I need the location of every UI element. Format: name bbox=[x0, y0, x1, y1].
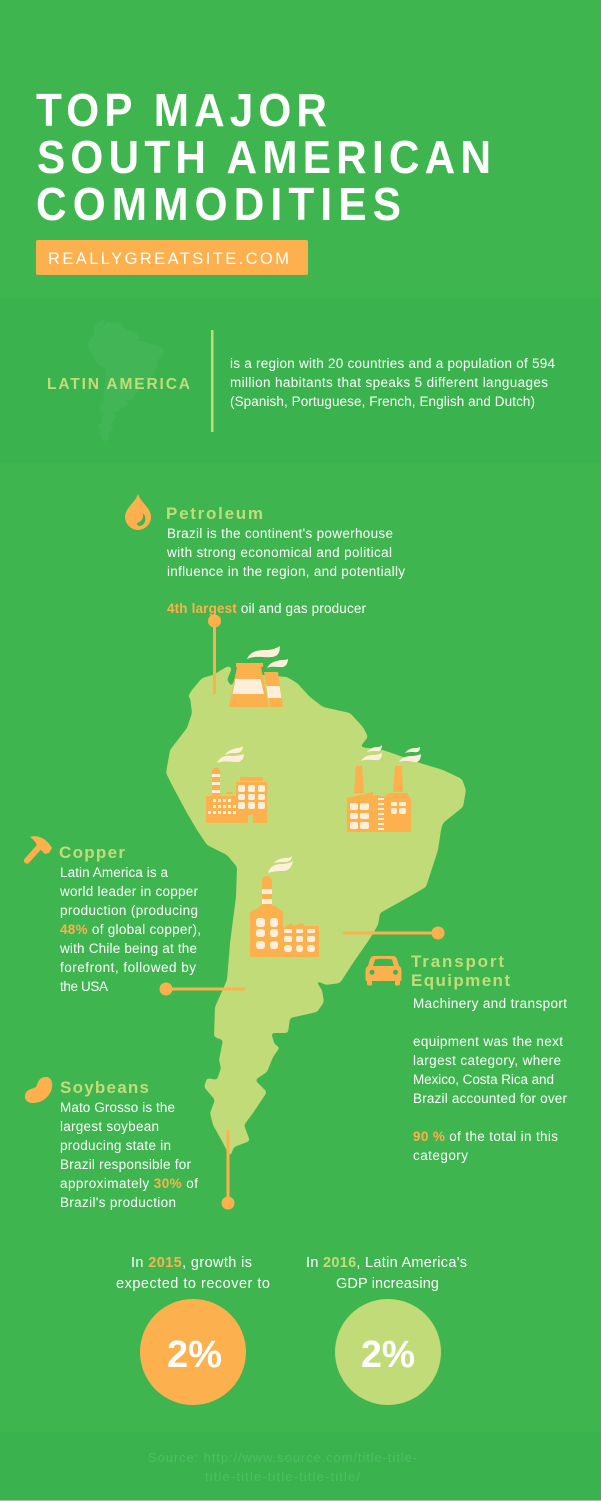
icon: factory centre bbox=[250, 856, 319, 957]
text: 2015 growth: In 2015, growth is bbox=[131, 1255, 252, 1271]
text: 2016 gdp bbox=[306, 1255, 467, 1292]
website badge: REALLYGREATSITE.COM bbox=[48, 250, 289, 268]
soybeans text: Brazil responsible for bbox=[60, 1157, 192, 1172]
petroleum text bbox=[166, 526, 405, 616]
heading: transport equipment: Equipment bbox=[411, 971, 510, 990]
pin: soybeans connector bbox=[222, 1130, 234, 1210]
panel: growth 2015 bbox=[116, 1255, 270, 1405]
icon: faded map silhouette bbox=[88, 320, 164, 443]
copper text: forefront, followed by bbox=[60, 960, 196, 975]
text: 2016 gdp: In 2016, Latin America's bbox=[306, 1255, 467, 1271]
soybeans text: Brazil's production bbox=[60, 1195, 176, 1210]
petroleum text: Brazil is the continent's powerhouse bbox=[167, 526, 393, 541]
map shape bbox=[166, 666, 466, 1157]
stat circle: 2% orange bbox=[140, 1299, 246, 1405]
icon: oil drop bbox=[125, 494, 151, 530]
heading: transport equipment: Transport bbox=[411, 952, 504, 971]
transport text bbox=[413, 996, 568, 1163]
copper text: the USA bbox=[60, 979, 108, 994]
pin: transport connector bbox=[343, 926, 444, 940]
text: 2016 gdp: GDP increasing bbox=[336, 1276, 439, 1292]
stat circle: 2% orange: 2% bbox=[167, 1334, 222, 1376]
panel: latin america intro bbox=[47, 320, 555, 443]
stat circle: 2% green bbox=[335, 1299, 441, 1405]
heading: petroleum: Petroleum bbox=[166, 504, 263, 523]
icon: factory left bbox=[206, 746, 267, 823]
copper text: 48% of global copper), bbox=[60, 922, 201, 937]
copper text bbox=[59, 865, 201, 994]
copper text: production (producing bbox=[60, 903, 198, 918]
website badge bbox=[36, 240, 308, 275]
stat circle: 2% green: 2% bbox=[361, 1334, 415, 1376]
divider bar bbox=[211, 330, 214, 432]
petroleum text: influence in the region, and potentially bbox=[167, 564, 405, 579]
text: 2015 growth bbox=[116, 1255, 270, 1292]
panel: transport equipment bbox=[343, 926, 568, 1163]
intro text: (Spanish, Portuguese, French, English and Dutch) bbox=[230, 394, 535, 409]
intro text bbox=[230, 356, 555, 409]
title: TOP MAJOR bbox=[36, 85, 327, 136]
pin: petroleum connector bbox=[208, 614, 221, 694]
transport text: largest category, where bbox=[413, 1053, 561, 1068]
heading: latin america: LATIN AMERICA bbox=[47, 376, 190, 393]
copper text: with Chile being at the bbox=[59, 941, 197, 956]
source note: title-title-title-title-title/ bbox=[205, 1469, 360, 1484]
icon: hammer bbox=[23, 836, 52, 865]
panel: petroleum bbox=[125, 494, 405, 694]
soybeans text: producing state in bbox=[60, 1138, 171, 1153]
title bbox=[36, 85, 491, 230]
heading: copper: Copper bbox=[59, 843, 125, 862]
soybeans text: Mato Grosso is the bbox=[60, 1100, 175, 1115]
soybeans text bbox=[60, 1100, 198, 1210]
transport text: Mexico, Costa Rica and bbox=[413, 1072, 554, 1087]
petroleum text: 4th largest oil and gas producer bbox=[167, 601, 366, 616]
panel: gdp 2016 bbox=[306, 1255, 467, 1405]
title: COMMODITIES bbox=[36, 179, 401, 230]
title: SOUTH AMERICAN bbox=[37, 132, 491, 183]
heading: transport equipment bbox=[411, 952, 510, 990]
icon: factory right bbox=[347, 745, 421, 832]
source note bbox=[148, 1450, 417, 1484]
soybeans text: approximately 30% of bbox=[60, 1176, 198, 1191]
soybeans text: largest soybean bbox=[60, 1119, 159, 1134]
transport text: Machinery and transport bbox=[413, 996, 567, 1011]
heading: soybeans: Soybeans bbox=[60, 1078, 149, 1097]
icon: oil refinery bbox=[229, 646, 288, 707]
transport text: 90 % of the total in this bbox=[413, 1129, 558, 1144]
icon: bean bbox=[25, 1077, 52, 1103]
intro text: million habitants that speaks 5 different languages bbox=[230, 375, 548, 390]
map of south america with factories bbox=[166, 646, 466, 1157]
panel: soybeans bbox=[25, 1077, 234, 1210]
icon: car bbox=[366, 956, 402, 986]
petroleum text: with strong economical and political bbox=[166, 545, 392, 560]
panel: copper bbox=[23, 836, 245, 996]
text: 2015 growth: expected to recover to bbox=[116, 1276, 270, 1292]
intro text: is a region with 20 countries and a population of 594 bbox=[230, 356, 555, 371]
transport text: equipment was the next bbox=[413, 1034, 563, 1049]
transport text: Brazil accounted for over bbox=[413, 1091, 568, 1106]
copper text: world leader in copper bbox=[59, 884, 198, 899]
transport text: category bbox=[413, 1148, 468, 1163]
source note: Source: http://www.source.com/title-title- bbox=[148, 1450, 417, 1465]
pin: copper connector bbox=[160, 982, 245, 996]
copper text: Latin America is a bbox=[60, 865, 168, 880]
